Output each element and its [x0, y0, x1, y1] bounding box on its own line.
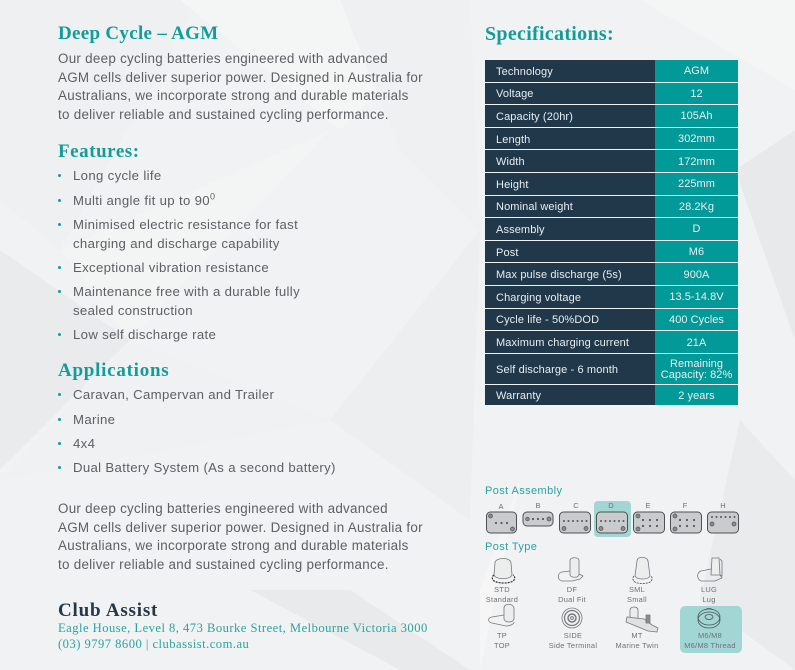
post type labels: STD	[494, 585, 510, 594]
post type labels: MT	[631, 631, 643, 640]
post type icons	[488, 556, 722, 632]
post type labels: DF	[567, 585, 577, 594]
post assembly diagrams	[486, 501, 739, 537]
post type labels: Standard	[486, 595, 518, 604]
specifications table	[485, 60, 738, 405]
icon: TP post	[489, 604, 514, 626]
heading: Post Type: Post Type	[485, 541, 537, 553]
features list	[58, 168, 300, 342]
features list: Long cycle life	[73, 168, 162, 183]
assembly E: E	[645, 501, 651, 510]
closing paragraph	[58, 501, 423, 572]
icon: DF post	[558, 558, 583, 581]
specifications table: M6	[689, 246, 704, 258]
specifications table: AGM	[684, 65, 709, 77]
closing paragraph: AGM cells deliver superior power. Designed in Australia for	[58, 520, 423, 535]
specifications table: 400 Cycles	[669, 314, 724, 326]
specifications table: Self discharge - 6 month	[496, 364, 618, 376]
features list: charging and discharge capability	[73, 236, 280, 251]
specifications table: Technology	[496, 66, 553, 78]
post type labels: Small	[627, 595, 647, 604]
applications list	[58, 387, 336, 475]
heading: Post Assembly: Post Assembly	[485, 485, 562, 497]
specifications table: 225mm	[678, 178, 715, 190]
contact details: Eagle House, Level 8, 473 Bourke Street, Melbourne Victoria 3000	[58, 621, 428, 635]
heading: Features: Features:	[58, 141, 140, 162]
post type labels: Lug	[702, 595, 716, 604]
applications list: Caravan, Campervan and Trailer	[73, 387, 274, 402]
specifications table: Post	[496, 247, 518, 259]
specifications table: 900A	[684, 269, 709, 281]
post type labels	[486, 585, 736, 650]
icon: MT post	[626, 607, 658, 632]
post type labels: LUG	[701, 585, 717, 594]
specifications table: 13.5-14.8V	[669, 291, 724, 303]
contact details: (03) 9797 8600 | clubassist.com.au	[58, 636, 249, 650]
icon: SML post	[633, 557, 652, 584]
post type labels: M6/M8	[698, 631, 722, 640]
icon: LUG post	[698, 558, 722, 581]
features list: Exceptional vibration resistance	[73, 260, 269, 275]
specifications table: 105Ah	[680, 110, 713, 122]
heading: Applications: Applications	[58, 360, 169, 381]
post type labels: Marine Twin	[615, 641, 658, 650]
specifications table: Voltage	[496, 88, 534, 100]
features list: sealed construction	[73, 303, 193, 318]
post type labels: SIDE	[564, 631, 582, 640]
assembly B	[523, 501, 553, 526]
specifications table: D	[692, 223, 700, 235]
assembly B: B	[535, 501, 541, 510]
specifications table: 21A	[687, 337, 706, 349]
assembly E	[634, 501, 664, 533]
post type labels: Dual Fit	[558, 595, 586, 604]
icon: SIDE terminal	[562, 608, 582, 628]
assembly H	[708, 501, 738, 533]
assembly D: D	[608, 501, 614, 510]
specifications table: Warranty	[496, 390, 541, 402]
intro paragraph: AGM cells deliver superior power. Designed in Australia for	[58, 70, 423, 85]
assembly F	[670, 501, 702, 533]
closing paragraph: to deliver reliable and sustained cycling performance.	[58, 557, 389, 572]
features list: Minimised electric resistance for fast	[73, 217, 298, 232]
specifications table: Width	[496, 156, 525, 168]
assembly H: H	[720, 501, 726, 510]
assembly A: A	[498, 502, 504, 511]
closing paragraph: Australians, we incorporate strong and durable materials	[58, 538, 409, 553]
highlight: M6/M8 post type	[680, 606, 742, 653]
company name: Club Assist	[58, 600, 158, 621]
specifications table: 172mm	[678, 156, 715, 168]
icon: M6/M8 washer	[698, 608, 720, 628]
intro paragraph: Our deep cycling batteries engineered with advanced	[58, 51, 388, 66]
assembly F: F	[683, 501, 688, 510]
specifications table: Maximum charging current	[496, 337, 629, 349]
specifications table: 12	[690, 88, 703, 100]
features list: Maintenance free with a durable fully	[73, 284, 300, 299]
assembly D	[596, 501, 628, 533]
specifications table: 28.2Kg	[679, 201, 714, 213]
post type labels: TP	[497, 631, 507, 640]
post type labels: SML	[629, 585, 645, 594]
applications list: Marine	[73, 412, 115, 427]
post type labels: M6/M8 Thread	[684, 641, 736, 650]
specifications table: Cycle life - 50%DOD	[496, 314, 599, 326]
applications list: Dual Battery System (As a second battery)	[73, 460, 336, 475]
specifications table: Capacity: 82%	[661, 369, 732, 381]
applications list: 4x4	[73, 436, 95, 451]
intro paragraph: to deliver reliable and sustained cycling performance.	[58, 107, 389, 122]
icon: STD post	[492, 558, 515, 583]
assembly C	[560, 501, 590, 533]
closing paragraph: Our deep cycling batteries engineered with advanced	[58, 501, 388, 516]
specifications table: Assembly	[496, 224, 545, 236]
highlight: assembly D	[594, 501, 631, 537]
features list: Multi angle fit up to 900	[73, 192, 215, 208]
specifications table: 2 years	[678, 390, 715, 402]
features list: Low self discharge rate	[73, 327, 216, 342]
specifications table: Nominal weight	[496, 201, 573, 213]
specifications table: Capacity (20hr)	[496, 111, 573, 123]
specifications table: Height	[496, 179, 529, 191]
post type labels: TOP	[494, 641, 510, 650]
heading: Deep Cycle AGM: Deep Cycle – AGM	[58, 23, 218, 44]
post type labels: Side Terminal	[549, 641, 597, 650]
assembly A	[486, 502, 516, 533]
specifications table: Length	[496, 134, 530, 146]
heading: Specifications: Specifications:	[485, 23, 614, 45]
specifications table: 302mm	[678, 133, 715, 145]
contact details	[58, 621, 428, 651]
assembly C: C	[573, 501, 579, 510]
intro paragraph: Australians, we incorporate strong and durable materials	[58, 88, 409, 103]
specifications table: Remaining	[670, 358, 723, 370]
specifications table: Charging voltage	[496, 292, 581, 304]
intro paragraph	[58, 51, 423, 122]
specifications table: Max pulse discharge (5s)	[496, 269, 622, 281]
